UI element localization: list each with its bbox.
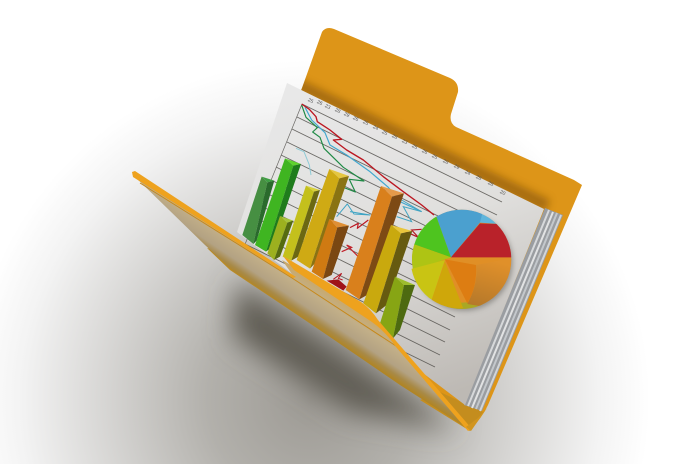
axis labels: 28 (334, 107, 341, 115)
slice: orange base (412, 210, 511, 309)
squiggle: red (350, 220, 368, 228)
squiggle: cyan (337, 204, 370, 217)
axis labels: 25 (431, 153, 438, 161)
axis labels (307, 97, 506, 197)
axis labels: 24 (464, 169, 471, 177)
axis labels: 23 (401, 138, 408, 146)
axis labels: 20 (499, 189, 506, 197)
bar 6: orange short (312, 219, 349, 279)
pie slices: upper (412, 210, 512, 309)
dark red blob (327, 279, 347, 291)
axis labels: 28 (475, 174, 482, 182)
shadow from paper on folder (285, 72, 550, 212)
bar 3: olive green (267, 216, 293, 260)
flap fold line (140, 183, 396, 346)
line chart traces (296, 104, 434, 228)
paper stack edges (464, 208, 563, 411)
axis labels: 25 (411, 143, 418, 151)
axis labels: 25 (362, 119, 369, 127)
slice: orange lower rim (467, 258, 511, 307)
squiggle: cyan right (397, 200, 422, 222)
chart grid lines (235, 104, 502, 367)
slice: gold (432, 262, 463, 308)
axis labels: 29 (453, 163, 460, 171)
pie chart (410, 210, 513, 311)
slice: yellow (412, 260, 445, 300)
axis labels: 24 (372, 124, 379, 132)
trace: green (302, 105, 364, 192)
bar 7: orange tall (346, 186, 404, 299)
trace: blue (305, 107, 422, 212)
axis labels: 29 (343, 111, 350, 119)
front flap of folder (132, 171, 487, 431)
slice: blue (436, 210, 482, 258)
slice: dark orange (445, 259, 476, 303)
squiggle: red lower (333, 273, 343, 280)
folder back panel with tab (301, 28, 582, 424)
axis labels: 28 (442, 158, 449, 166)
axis labels: 26 (316, 99, 323, 107)
axis labels: 26 (421, 148, 428, 156)
lower squiggles and bars (242, 158, 513, 338)
folder inner bottom (420, 392, 483, 431)
axis labels: 26 (352, 115, 359, 123)
trace: red (302, 104, 434, 215)
pie slices: exploded yellow (410, 260, 463, 309)
slice: light blue (480, 213, 496, 224)
bar 1: dark green (242, 177, 274, 244)
axis labels: 25 (381, 129, 388, 137)
squiggle: red mid (342, 245, 358, 257)
slice: green (412, 216, 451, 257)
folder bottom corner (466, 408, 487, 431)
bar 4: yellow (283, 186, 320, 261)
folder body (301, 28, 582, 424)
flap lower edge (207, 248, 470, 431)
slice: red (451, 223, 511, 257)
axis labels: 28 (391, 133, 398, 141)
bar 2: bright green (255, 158, 301, 252)
axis labels: 28 (487, 180, 494, 188)
pie shadow (415, 213, 513, 311)
flap orange top edge (132, 171, 472, 431)
slice: lime rim (446, 302, 483, 309)
axis labels: 23 (324, 103, 331, 111)
squiggle: red right (402, 229, 422, 237)
bar 9: olive (380, 277, 415, 338)
axis labels: 25 (307, 97, 314, 105)
front sheet (237, 83, 544, 405)
slice: yellow green (412, 244, 451, 268)
bar 8: yellow gold (363, 225, 412, 313)
bar 5: gold long (297, 169, 349, 269)
flap panel (132, 174, 470, 430)
trace: light blue (296, 148, 311, 175)
